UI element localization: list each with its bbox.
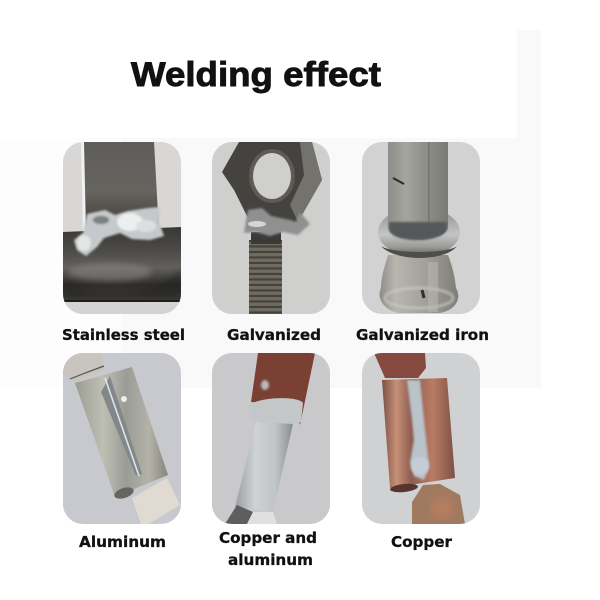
weld flange [254,398,303,422]
weld bead [74,207,164,256]
panel: copper and aluminum photo [212,353,330,524]
base plate [63,227,181,301]
hex nut [222,142,322,232]
white strip [132,478,180,526]
panel: galvanized iron photo [362,142,480,314]
label: galvanized: Galvanized [227,326,321,344]
lower stub [412,484,465,524]
label: aluminum: Aluminum [79,533,166,551]
title: Welding effect [131,56,382,94]
label: copper: Copper [391,533,452,551]
weld collar [378,214,460,252]
copper tube [382,378,455,488]
panel: aluminum photo [63,353,181,526]
background wash [0,30,541,388]
panel: copper photo [362,353,480,524]
panel: galvanized photo [212,142,330,314]
weld [244,208,310,236]
copper pipe [251,353,315,425]
tube body [75,367,168,497]
label: galvanized iron: Galvanized iron [356,326,489,344]
label: copper and aluminum: Copper and [219,529,317,547]
base [380,255,458,313]
label: copper and aluminum: aluminum [228,551,313,569]
steel strip [83,142,159,232]
label: stainless steel: Stainless steel [62,326,185,344]
aluminum tube [235,422,293,512]
panel: stainless steel photo [63,142,181,314]
bolt shank [249,240,282,314]
pipe [388,142,448,240]
